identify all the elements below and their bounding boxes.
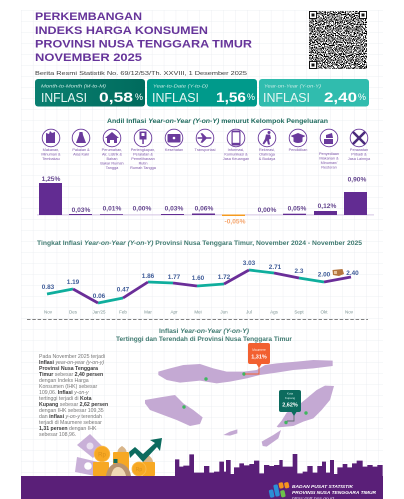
bar chart: contribution to inflation: 0,90% <box>348 176 366 184</box>
arrow: rising trend <box>129 438 162 462</box>
heading: map title <box>116 328 293 343</box>
icon labels: Pakaian & <box>72 148 90 152</box>
map: Rote <box>262 430 281 447</box>
text block: summary paragraph: dengan Indeks Harga <box>39 378 89 384</box>
text block: summary paragraph: dengan IHK <box>68 426 97 432</box>
panel: year-on-year inflation card: % <box>358 92 366 102</box>
icon: coins: Rp <box>98 452 106 458</box>
map: Sumba <box>145 395 203 426</box>
icon: food service <box>320 129 338 147</box>
bar chart: contribution to inflation: 0,01% <box>103 206 121 212</box>
icon: coins: Rp <box>136 467 142 473</box>
line chart: inflation trend: 1.77 <box>168 274 181 281</box>
text block: summary paragraph: Provinsi Nusa Tenggara <box>39 366 98 372</box>
icon labels: Makanan & <box>319 156 339 160</box>
title <box>35 11 252 64</box>
icon: QR code <box>309 11 367 69</box>
icon labels: Perumahan, <box>102 148 122 152</box>
map: Sabu <box>223 429 237 436</box>
bar chart: contribution to inflation: 1,25% <box>42 176 60 183</box>
icon labels: Transportasi <box>195 148 216 152</box>
text block: summary paragraph: inflasi y-on-y terendah <box>49 414 102 420</box>
footer text: BPS name: PROVINSI NUSA TENGGARA TIMUR <box>292 490 376 496</box>
icon labels: Komunikasi & <box>224 152 248 156</box>
line chart: inflation trend: 2.00 <box>318 272 331 278</box>
heading: yearly inflation trend: Tingkat Inflasi Year-on-Year (Y-on-Y) Provinsi Nusa Tenggara Timur, November 2024 - November 2025 <box>37 240 363 247</box>
line chart: inflation trend: Apr <box>170 310 178 314</box>
panel: year-to-date inflation card <box>147 79 257 106</box>
heading: contribution by expenditure group: Andil Inflasi Year-on-Year (Y-on-Y) menurut Kelompok Pengeluaran <box>107 118 328 125</box>
title: PROVINSI NUSA TENGGARA TIMUR <box>35 38 252 50</box>
text block: summary paragraph: 1,31 persen <box>39 426 68 432</box>
icon labels: Restoran <box>321 166 337 170</box>
illustration: money, coins and rising arrow <box>75 434 162 476</box>
icon labels: Tangga <box>106 166 119 170</box>
panel: year-to-date inflation card: % <box>247 92 255 102</box>
callout: Kota Kupang highest inflation: Kupang <box>285 396 296 400</box>
map: Timor <box>277 386 334 427</box>
panel: month-to-month inflation card: INFLASI <box>41 91 87 105</box>
footer text: BPS name: BADAN PUSAT STATISTIK <box>292 484 353 490</box>
icon labels: Informasi, <box>228 148 244 152</box>
line chart: inflation trend: 0.83 <box>42 284 55 291</box>
icon labels: Air, Listrik & <box>102 152 122 156</box>
icon labels: Perlengkapan, <box>131 148 155 152</box>
panel: month-to-month inflation card: Month-to-Month (M-to-M) <box>41 84 106 90</box>
icon labels: Pribadi & <box>351 152 367 156</box>
line chart: inflation trend: Okt <box>320 310 328 314</box>
panel: year-on-year inflation card: INFLASI <box>263 91 310 105</box>
icon labels: Pendidikan <box>289 148 307 152</box>
line chart: inflation trend: Sept <box>294 310 304 314</box>
line chart: inflation trend: Mei <box>194 310 202 314</box>
icon labels: Pemeliharaan <box>131 157 155 161</box>
callout: Kota Kupang highest inflation: 2,62% <box>282 402 298 408</box>
text block: summary paragraph: Kota <box>80 396 92 402</box>
bar chart: contribution to inflation: 0,00% <box>133 206 151 212</box>
title: PERKEMBANGAN <box>35 11 142 23</box>
line chart: inflation trend: 2.71 <box>269 264 282 271</box>
icon labels: Makanan, <box>43 148 59 152</box>
icon labels: & Budaya <box>259 157 276 161</box>
line chart: inflation trend: 2.3 <box>295 268 304 275</box>
text block: summary paragraph: terjadi di Maumere sebesar <box>39 420 102 426</box>
text block: summary paragraph: year-on-year (y-on-y) <box>54 360 104 366</box>
text block: summary paragraph: Inflasi <box>39 360 55 366</box>
title: NOVEMBER 2025 <box>35 52 142 64</box>
icon: money bags <box>106 446 153 476</box>
callout: Kota Kupang highest inflation <box>279 390 301 421</box>
text block: summary paragraph: tertinggi terjadi di <box>39 396 80 402</box>
line chart: inflation trend: Ags <box>270 310 279 314</box>
icon: food and drink <box>42 129 60 147</box>
line chart: inflation trend: 1.60 <box>192 275 205 282</box>
bar chart: contribution to inflation <box>37 176 374 226</box>
map: Nusa Tenggara Timur <box>145 360 334 447</box>
line chart: inflation trend: 1.19 <box>67 279 80 286</box>
panel: year-to-date inflation card: INFLASI <box>152 91 199 105</box>
bar chart: contribution to inflation: 0,06% <box>195 206 213 212</box>
panel: month-to-month inflation card: 0,58 <box>99 89 133 105</box>
text block: summary paragraph: sebesar 2,40 persen <box>55 372 103 378</box>
footer: skyline and band <box>21 454 383 499</box>
icon labels <box>41 148 371 170</box>
icon row: expenditure groups <box>42 129 368 147</box>
icon labels: Peralatan & <box>133 152 153 156</box>
panel: month-to-month inflation card <box>35 79 145 106</box>
icon labels: Rumah Tangga <box>130 166 157 170</box>
bar chart: contribution to inflation: 0,12% <box>318 203 336 210</box>
icon labels: Alas Kaki <box>73 152 89 156</box>
subtitle: release number: Berita Resmi Statistik No. 69/12/53/Th. XXVIII, 1 Desember 2025 <box>35 71 247 77</box>
icon: personal care <box>350 129 368 147</box>
bar chart: contribution to inflation: 0,03% <box>165 206 183 212</box>
icon: communication <box>227 129 245 147</box>
callout: Maumere lowest inflation: Maumere <box>252 348 266 352</box>
line chart: inflation trend: Nov <box>345 310 354 314</box>
bar chart: contribution to inflation: -0,05% <box>225 218 246 226</box>
text block: summary paragraph: dengan IHK sebesar 109,35 <box>39 408 104 414</box>
line chart: inflation trend: 2.40 <box>346 270 359 277</box>
line chart: inflation trend: Mar <box>144 310 152 314</box>
heading: map title: Tertinggi dan Terendah di Provinsi Nusa Tenggara Timur <box>116 336 293 343</box>
icon labels: Bakar Rumah <box>100 162 124 166</box>
icon labels: Olahraga <box>259 152 276 156</box>
line chart: inflation trend: Des <box>69 310 78 314</box>
icon: housing <box>103 129 121 147</box>
line chart: inflation trend: Jan'25 <box>92 310 106 314</box>
icon: education <box>289 129 307 147</box>
text block: summary paragraph: sebesar 108,96. <box>39 432 76 438</box>
text block: summary paragraph: Kupang <box>39 402 58 408</box>
text block: summary paragraph: Inflasi y-on-y <box>58 390 89 396</box>
icon labels: Penyediaan <box>319 152 339 156</box>
line chart: inflation trend: Nov <box>44 310 53 314</box>
panel: year-to-date inflation card: 1,56 <box>216 89 246 105</box>
callout: Maumere lowest inflation: 1,31% <box>251 354 267 360</box>
text block: summary paragraph: sebesar 2,62 persen <box>60 402 108 408</box>
icon: household equipment <box>134 129 152 147</box>
text block: summary paragraph: Timur <box>39 372 53 378</box>
line chart: inflation trend: 0.47 <box>117 286 130 294</box>
line chart: inflation trend: Feb <box>119 310 127 314</box>
icon: transport <box>196 129 214 147</box>
icon labels: Bahan <box>107 157 117 161</box>
text block: summary paragraph: Pada November 2025 terjadi <box>39 354 105 360</box>
title: INDEKS HARGA KONSUMEN <box>35 25 208 37</box>
text block: summary paragraph: Konsumen (IHK) sebesar <box>39 384 98 390</box>
line chart: inflation trend: Jul <box>246 310 252 314</box>
icon labels: Perawatan <box>350 148 368 152</box>
bar chart: contribution to inflation: 0,05% <box>288 206 306 212</box>
icon labels: Tembakau <box>42 157 60 161</box>
line chart: inflation trend: 1.72 <box>218 274 231 281</box>
icon labels: Minuman & <box>41 152 61 156</box>
icon labels: Rutin <box>139 162 147 166</box>
footer text: BPS name <box>292 484 376 499</box>
icon: banknotes <box>75 434 103 476</box>
icon labels: Jasa Keuangan <box>223 157 249 161</box>
icon labels: Minuman/ <box>321 161 338 165</box>
callout: Kota Kupang highest inflation: Kota <box>287 392 293 396</box>
line chart: inflation trend <box>42 260 359 314</box>
line chart: inflation trend: Jun <box>220 310 228 314</box>
map: Flores and Alor <box>158 360 333 383</box>
icon labels: Kesehatan <box>165 148 183 152</box>
bar chart: contribution to inflation: 0,03% <box>72 207 90 214</box>
icon: recreation <box>258 129 276 147</box>
panel: year-on-year inflation card <box>259 79 369 106</box>
icon: book <box>332 269 344 276</box>
icon: health <box>165 129 183 147</box>
panel: month-to-month inflation card: % <box>135 92 143 102</box>
icon: coins <box>93 446 155 476</box>
panel: year-on-year inflation card: Year-on-Year (Y-on-Y) <box>264 84 321 90</box>
icon: BPS logo <box>268 481 291 499</box>
text block: summary paragraph: 109,06. <box>39 390 58 396</box>
line chart: inflation trend: 0.06 <box>93 293 106 300</box>
heading: map title: Inflasi Year-on-Year (Y-on-Y) <box>159 328 249 335</box>
callout: Maumere lowest inflation <box>245 343 270 374</box>
bar chart: contribution to inflation: 0,00% <box>258 207 276 214</box>
icon labels: Jasa Lainnya <box>348 157 371 161</box>
icon labels: Rekreasi, <box>259 148 275 152</box>
line chart: inflation trend: 3.03 <box>243 260 256 267</box>
line chart: inflation trend: 1.86 <box>142 273 155 280</box>
panel: year-on-year inflation card: 2,40 <box>324 89 357 105</box>
text block: summary paragraph: dan <box>39 414 49 420</box>
icon: clothing <box>72 129 90 147</box>
panel: year-to-date inflation card: Year-to-Date (Y-to-D) <box>153 84 208 90</box>
